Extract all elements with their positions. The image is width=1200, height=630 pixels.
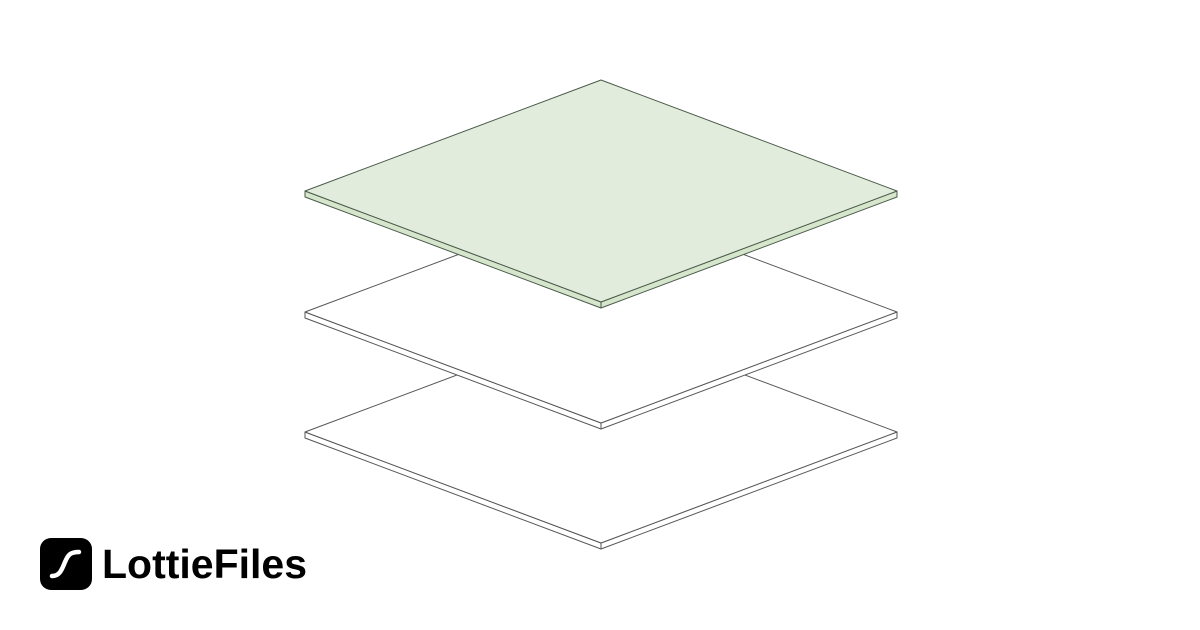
logo text: LottieFiles — [102, 541, 307, 587]
layer: top (green) — [305, 80, 897, 308]
layer: middle — [305, 201, 897, 429]
layer: bottom — [305, 321, 897, 549]
icon: logo mark — [40, 538, 92, 590]
logo: LottieFiles — [40, 538, 307, 590]
